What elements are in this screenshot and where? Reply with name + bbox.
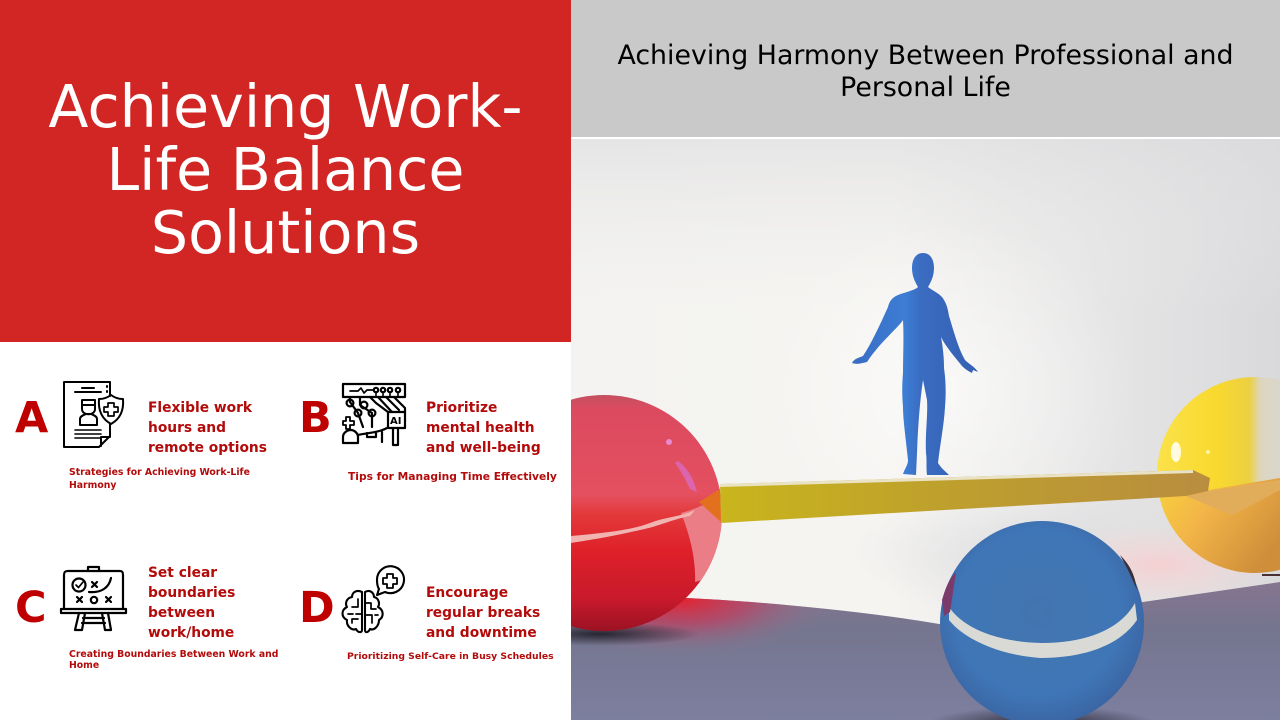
subtitle panel <box>571 0 1280 137</box>
caption D: Prioritizing Self-Care in Busy Schedules <box>347 651 554 662</box>
image: figure balancing on a beam between three spheres <box>571 139 1280 720</box>
caption A <box>69 467 250 491</box>
yellow sphere base line <box>1262 574 1280 576</box>
heading C: between <box>148 605 215 621</box>
heading A: Flexible work <box>148 400 252 416</box>
heading A <box>148 400 267 456</box>
title panel <box>0 0 571 342</box>
wall background <box>571 139 1280 720</box>
title panel: Achieving Work- <box>48 73 523 141</box>
caption C: Creating Boundaries Between Work and <box>69 649 278 660</box>
heading C: work/home <box>148 625 234 641</box>
heading B: mental health <box>426 420 535 436</box>
icon: medical document with shield <box>63 381 124 448</box>
caption C <box>69 649 278 671</box>
heading C: boundaries <box>148 585 235 601</box>
red sphere <box>571 395 724 632</box>
caption A: Harmony <box>69 480 116 491</box>
subtitle panel: Achieving Harmony Between Professional and <box>617 40 1234 71</box>
letter D: D <box>299 583 335 633</box>
title panel: Solutions <box>151 199 420 267</box>
blue sphere <box>940 521 1144 720</box>
letter B: B <box>299 393 332 443</box>
letter A: A <box>15 393 48 443</box>
heading D: and downtime <box>426 625 537 641</box>
caption B: Tips for Managing Time Effectively <box>348 470 557 483</box>
yellow beam <box>699 470 1210 523</box>
subtitle panel: Personal Life <box>840 72 1011 103</box>
caption A: Strategies for Achieving Work-Life <box>69 467 250 478</box>
heading C <box>148 565 235 641</box>
icon: brain with medical speech bubble <box>341 565 406 634</box>
heading D: Encourage <box>426 585 508 601</box>
heading A: hours and <box>148 420 226 436</box>
item A <box>15 381 267 491</box>
yellow sphere <box>1150 377 1280 580</box>
item D <box>299 565 554 662</box>
letter C: C <box>15 583 47 633</box>
heading B: and well-being <box>426 440 541 456</box>
icon: strategy board on easel <box>60 566 128 632</box>
heading B <box>426 400 541 456</box>
title panel: Life Balance <box>107 136 464 204</box>
heading C: Set clear <box>148 565 217 581</box>
heading D <box>426 585 540 641</box>
heading D: regular breaks <box>426 605 540 621</box>
white divider <box>571 137 1280 139</box>
caption C: Home <box>69 660 99 671</box>
heading B: Prioritize <box>426 400 497 416</box>
item B <box>299 382 557 483</box>
icon: AI circuit board <box>342 382 406 446</box>
item C <box>15 565 278 671</box>
heading A: remote options <box>148 440 267 456</box>
icon: AI circuit board: AI <box>390 416 401 427</box>
floor <box>571 582 1280 720</box>
blue figure <box>852 253 978 475</box>
